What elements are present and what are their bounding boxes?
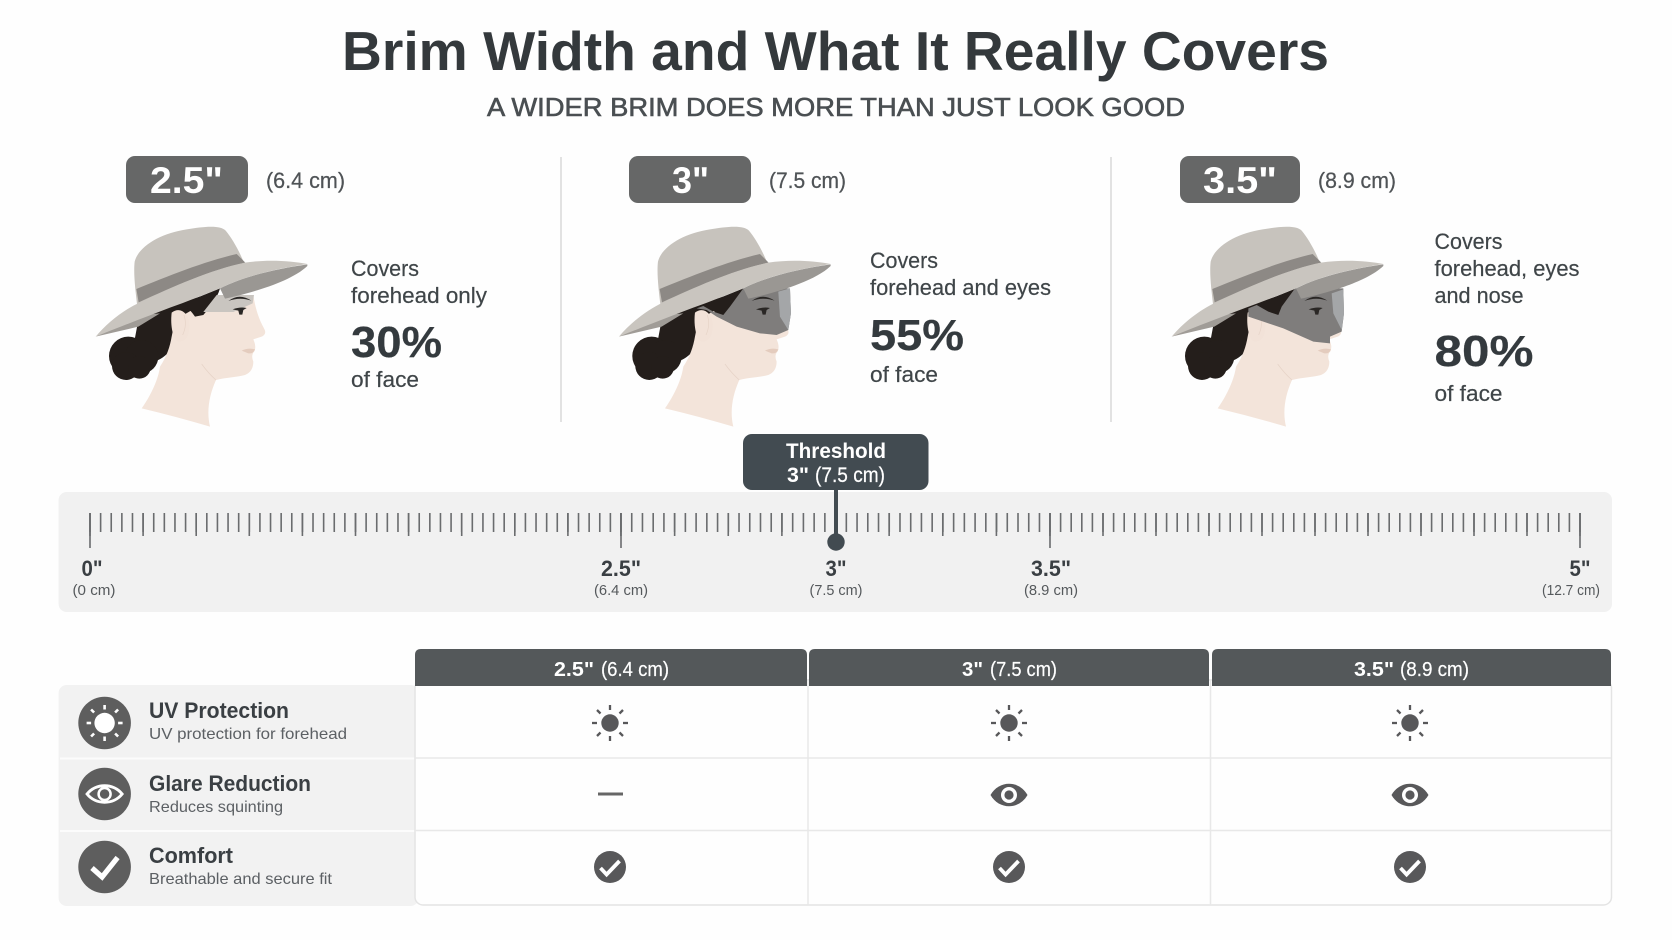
column header: 3 inch: 3" xyxy=(962,659,983,681)
column header: 3 inch: (7.5 cm) xyxy=(990,659,1057,681)
tick label: 3.5 inch: 3.5" xyxy=(1031,556,1071,581)
table grid xyxy=(415,680,1612,905)
table cells: comfort row xyxy=(594,851,1426,883)
panel: 3 inch brim xyxy=(619,156,1051,427)
badge: 3.5 inch: 3.5" xyxy=(1203,160,1277,201)
comparison table xyxy=(59,649,1612,906)
column header: 3.5 inch: (8.9 cm) xyxy=(1400,659,1469,681)
column header: 2.5 inch xyxy=(415,649,807,686)
marker stem and dot xyxy=(827,488,845,551)
size in centimetres: (8.9 cm) xyxy=(1318,168,1396,193)
tick label: 3 inch: 3" xyxy=(826,556,846,581)
row label: UV protection: UV protection for forehead xyxy=(149,726,347,743)
title: Brim Width and What It Really Covers xyxy=(342,20,1329,82)
row label: glare reduction: Glare Reduction xyxy=(149,771,311,796)
threshold callout text: Threshold xyxy=(786,440,886,463)
tick label: 3.5 inch: (8.9 cm) xyxy=(1024,583,1078,599)
table cells: UV protection row xyxy=(592,705,1428,741)
tick label: 2.5 inch: (6.4 cm) xyxy=(594,583,648,599)
coverage text: forehead and eyes xyxy=(870,275,1051,300)
size in centimetres: (7.5 cm) xyxy=(769,168,846,193)
coverage text: Covers xyxy=(351,256,419,281)
coverage text: 80% xyxy=(1434,327,1534,376)
row label: comfort: Comfort xyxy=(149,843,234,868)
tick label: 0 inch: 0" xyxy=(82,556,102,581)
coverage text: forehead, eyes xyxy=(1434,256,1580,281)
threshold callout xyxy=(743,434,928,490)
badge: 3 inch xyxy=(629,156,751,203)
column header: 2.5 inch: (6.4 cm) xyxy=(601,659,669,681)
column header: 3.5 inch xyxy=(1212,649,1611,686)
badge: 3.5 inch xyxy=(1180,156,1300,203)
tick label: 5 inch: 5" xyxy=(1570,556,1590,581)
row label: comfort: Breathable and secure fit xyxy=(149,871,333,888)
coverage text: of face xyxy=(1434,381,1502,406)
subtitle: A WIDER BRIM DOES MORE THAN JUST LOOK GOOD xyxy=(487,92,1185,122)
icon: check mark xyxy=(78,841,131,893)
row label: glare reduction xyxy=(78,768,311,820)
row label: comfort xyxy=(78,841,333,893)
threshold marker xyxy=(743,434,928,551)
size in centimetres: (6.4 cm) xyxy=(266,168,345,193)
badge: 2.5 inch: 2.5" xyxy=(150,160,223,201)
icon: sun xyxy=(78,697,131,749)
column header: 3.5 inch: 3.5" xyxy=(1354,659,1394,681)
tick label: 3 inch: (7.5 cm) xyxy=(810,583,862,599)
tick label: 3.5 inch xyxy=(1024,556,1078,599)
tick label: 5 inch: (12.7 cm) xyxy=(1542,583,1600,599)
tick label: 2.5 inch xyxy=(594,556,648,599)
ruler background xyxy=(59,492,1612,612)
column header: 3 inch xyxy=(809,649,1209,686)
threshold callout text: (7.5 cm) xyxy=(815,464,885,487)
ruler ticks xyxy=(89,513,1581,548)
row labels panel xyxy=(59,685,419,906)
threshold callout text: 3" xyxy=(787,464,809,487)
tick label: 3 inch xyxy=(810,556,862,599)
coverage text: of face xyxy=(351,367,419,392)
row label: glare reduction: Reduces squinting xyxy=(149,799,283,816)
coverage text: Covers xyxy=(870,248,938,273)
badge: 2.5 inch xyxy=(126,156,248,203)
row label: UV protection xyxy=(78,697,347,749)
table cells: glare reduction row xyxy=(598,784,1428,806)
tick label: 5 inch xyxy=(1542,556,1600,599)
coverage text xyxy=(1434,229,1580,406)
panel: 3.5 inch brim xyxy=(1172,156,1580,427)
row label: UV protection: UV Protection xyxy=(149,698,289,723)
coverage text: Covers xyxy=(1434,229,1502,254)
illustration: woman in hat, forehead eyes and nose shaded xyxy=(1172,227,1383,427)
coverage text: and nose xyxy=(1434,283,1524,308)
column header: 2.5 inch: 2.5" xyxy=(554,659,594,681)
tick label: 0 inch: (0 cm) xyxy=(72,583,116,599)
badge: 3 inch: 3" xyxy=(672,160,709,201)
coverage text: of face xyxy=(870,362,938,387)
icon: eye xyxy=(78,768,131,820)
panel: 2.5 inch brim xyxy=(96,156,488,427)
coverage text: forehead only xyxy=(351,283,488,308)
coverage text: 55% xyxy=(870,311,964,360)
coverage text xyxy=(351,256,488,392)
coverage text xyxy=(870,248,1051,387)
tick label: 0 inch xyxy=(72,556,116,599)
illustration: woman in hat, forehead and eyes shaded xyxy=(619,227,831,427)
threshold callout text xyxy=(786,440,886,487)
illustration: woman in hat, forehead shaded xyxy=(96,227,307,427)
tick label: 2.5 inch: 2.5" xyxy=(601,556,641,581)
coverage text: 30% xyxy=(351,318,442,367)
ruler scale xyxy=(59,492,1612,612)
